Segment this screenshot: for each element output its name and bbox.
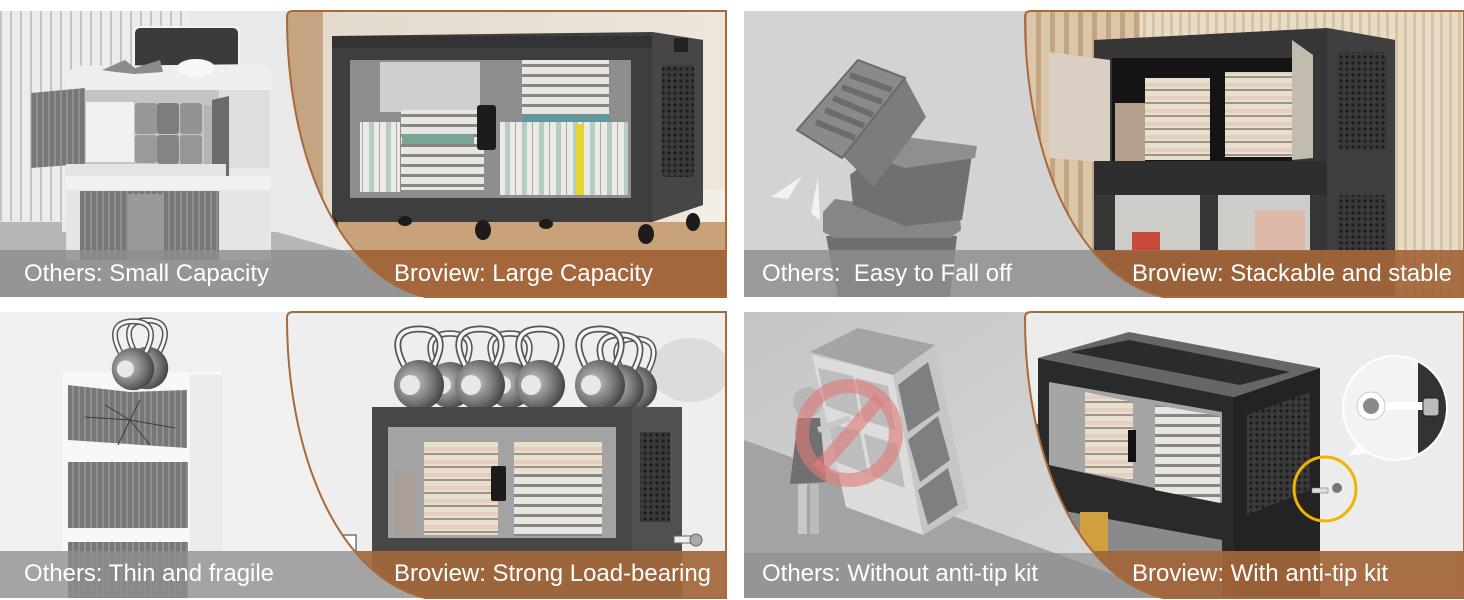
panel: broview strong load-bearing: [343, 313, 725, 597]
caption bar: others: [0, 250, 440, 297]
icon: black cabinet with folded linen: [372, 407, 702, 600]
caption: broview stackable and stable: Broview: Stackable and stable: [1132, 260, 1452, 287]
caption: others thin and fragile: Others: Thin and fragile: [24, 560, 274, 587]
icon: kettlebell on thin cabinet: [112, 320, 168, 390]
icon: thin white cabinet with cracked door: [68, 385, 188, 598]
caption: broview strong load-bearing: Broview: Strong Load-bearing: [394, 560, 711, 587]
callout: anti-tip kit zoom: [1343, 356, 1448, 460]
icon: black cabinet against wall: [1038, 332, 1320, 600]
caption bar: others: [744, 250, 1184, 297]
caption: broview large capacity: Broview: Large Capacity: [394, 260, 653, 287]
panel: others thin and fragile: [0, 312, 440, 600]
panel: broview with anti-tip kit: [1025, 312, 1464, 600]
panel: others small capacity: [0, 11, 440, 300]
panel: others without anti-tip kit: [744, 312, 1184, 600]
icon: kettlebells on cabinet: [394, 329, 657, 412]
icon: black cabinet with books: [322, 32, 703, 244]
icon: anti-tip kit highlight circle: [1294, 457, 1356, 521]
caption bar: broview: [1094, 551, 1463, 597]
icon: stacked black cabinets with linen: [1049, 28, 1395, 297]
caption: others small capacity: Others: Small Capacity: [24, 260, 269, 287]
icon: toppling storage boxes: [771, 60, 977, 297]
panel: broview large capacity: [287, 11, 727, 297]
panel: broview stackable and stable: [1025, 11, 1464, 297]
icon: child climbing: [790, 387, 850, 534]
icon: small white cabinet: [31, 27, 272, 260]
caption bar: broview: [356, 551, 725, 597]
caption bar: broview: [1093, 250, 1463, 296]
caption: others easy to fall off: Others: Easy to Fall off: [762, 260, 1012, 287]
caption bar: others: [0, 551, 440, 598]
caption bar: broview: [355, 250, 725, 296]
panel: others easy to fall off: [744, 11, 1184, 297]
icon: tilted cabinet stack: [810, 328, 968, 535]
caption bar: others: [744, 553, 1184, 598]
icon: prohibition sign: [802, 386, 896, 480]
caption: others without anti-tip kit: Others: Without anti-tip kit: [762, 560, 1038, 587]
caption: broview with anti-tip kit: Broview: With anti-tip kit: [1132, 560, 1388, 587]
